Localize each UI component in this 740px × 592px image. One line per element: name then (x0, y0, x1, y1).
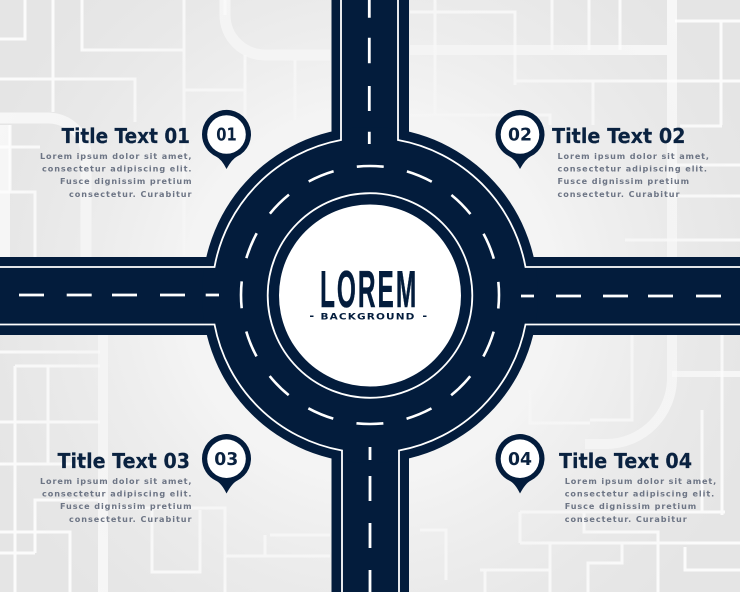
description 02 (558, 151, 709, 199)
description 02: Fusce dignissim pretium (558, 176, 689, 186)
pin 01: 01 (216, 126, 237, 146)
subheading right dash (423, 316, 426, 317)
title 01: Title Text 01 (62, 124, 190, 148)
pin 04 (495, 434, 544, 494)
center heading: LOREM (320, 260, 418, 319)
block 03 (40, 434, 251, 524)
pin 02 (495, 110, 544, 169)
vertical road (332, 0, 409, 592)
center subheading: BACKGROUND (320, 312, 416, 322)
block 01 (40, 110, 251, 199)
center circle badge (279, 204, 461, 386)
pin 04: 04 (508, 450, 532, 470)
block 02 (495, 110, 709, 199)
description 01 (40, 151, 192, 199)
description 02: consectetur adipiscing elit. (558, 164, 707, 174)
description 01: Lorem ipsum dolor sit amet, (40, 151, 192, 161)
description 02: Lorem ipsum dolor sit amet, (558, 151, 709, 161)
ring lane dashes (241, 166, 499, 424)
description 01: consectetur adipiscing elit. (42, 164, 192, 174)
roundabout (202, 127, 538, 463)
description 03: consectetur adipiscing elit. (42, 488, 192, 498)
description 02: consectetur. Curabitur (558, 189, 680, 199)
description 04: Lorem ipsum dolor sit amet, (565, 476, 716, 486)
description 04: consectetur. Curabitur (565, 514, 687, 524)
description 03: consectetur. Curabitur (69, 514, 192, 524)
pin 03: 03 (214, 450, 238, 470)
inner ring line (268, 193, 472, 398)
title 03: Title Text 03 (58, 449, 190, 473)
description 03: Fusce dignissim pretium (60, 501, 192, 511)
description 01: consectetur. Curabitur (69, 189, 192, 199)
description 04 (565, 476, 716, 524)
pin 01 (202, 110, 251, 169)
block 04 (495, 434, 716, 524)
description 03 (40, 476, 192, 524)
subheading left dash (310, 316, 314, 317)
description 03: Lorem ipsum dolor sit amet, (40, 476, 192, 486)
pin 03 (202, 434, 251, 494)
pin 02: 02 (508, 126, 532, 146)
title 02: Title Text 02 (552, 124, 686, 148)
description 01: Fusce dignissim pretium (60, 176, 192, 186)
description 04: consectetur adipiscing elit. (565, 488, 714, 498)
title 04: Title Text 04 (559, 449, 692, 473)
horizontal road (0, 257, 740, 335)
description 04: Fusce dignissim pretium (565, 501, 696, 511)
